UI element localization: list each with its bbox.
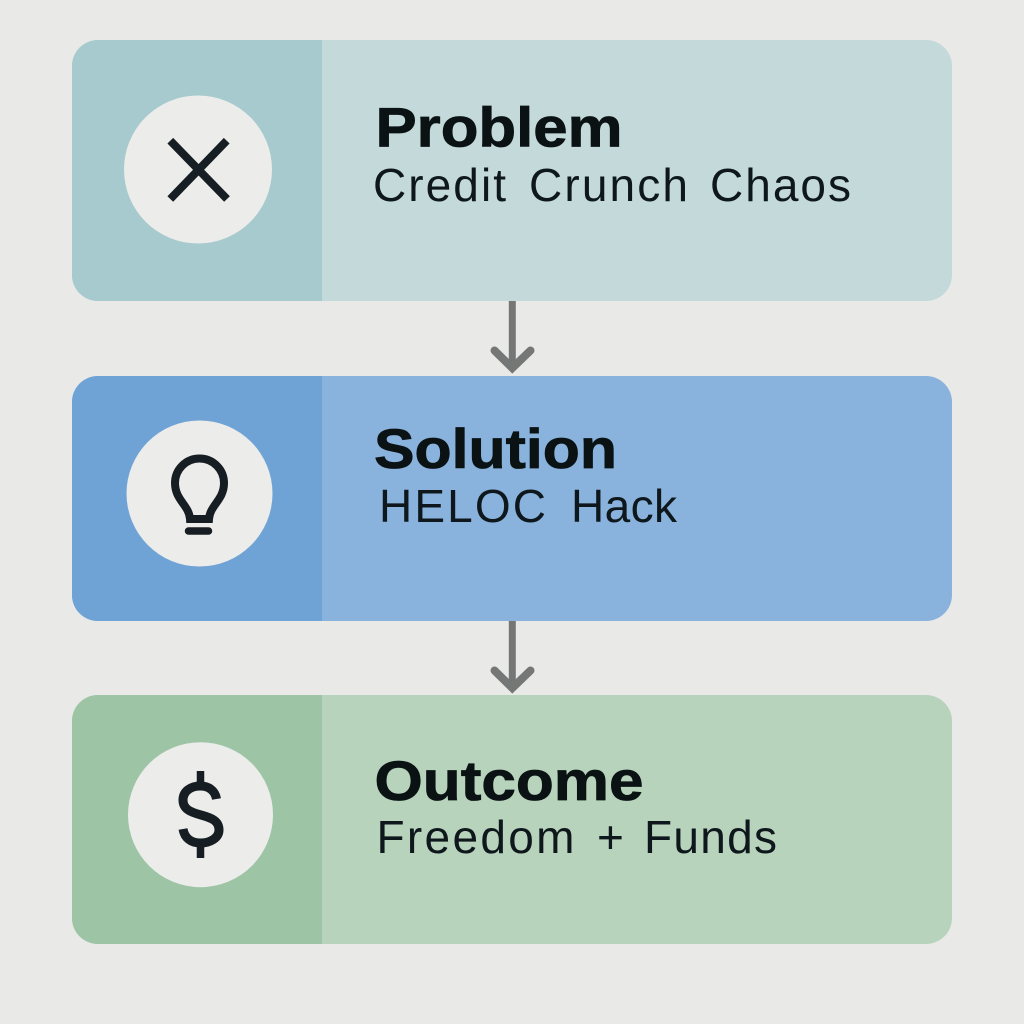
heading: Problem: Problem [376,96,622,158]
heading: Solution: Solution [374,417,617,480]
arrow: solution to outcome [494,621,530,689]
icon: dollar sign [128,742,273,887]
text: HELOC Hack [379,480,678,532]
text: Credit Crunch Chaos: Chaos [710,159,851,211]
arrow: problem to solution [494,301,530,370]
text: Freedom + Funds: Freedom [376,811,574,863]
icon column: problem [72,40,322,301]
text: Credit Crunch Chaos [373,159,851,211]
text: Freedom + Funds: + [597,811,624,863]
text: Freedom + Funds: Funds [644,811,777,863]
icon column: solution [72,376,322,621]
panel: outcome [72,695,952,944]
panel: solution [72,376,952,621]
panel: problem [72,40,952,301]
text: Credit Crunch Chaos: Credit [373,159,506,211]
heading: Outcome: Outcome [374,749,644,812]
text: HELOC Hack: Hack [571,480,678,532]
text: Credit Crunch Chaos: Crunch [529,159,688,211]
icon: light bulb [126,420,272,566]
text: Freedom + Funds [376,811,777,863]
icon: X mark [124,96,272,244]
icon column: outcome [72,695,322,944]
text: HELOC Hack: HELOC [379,480,546,532]
